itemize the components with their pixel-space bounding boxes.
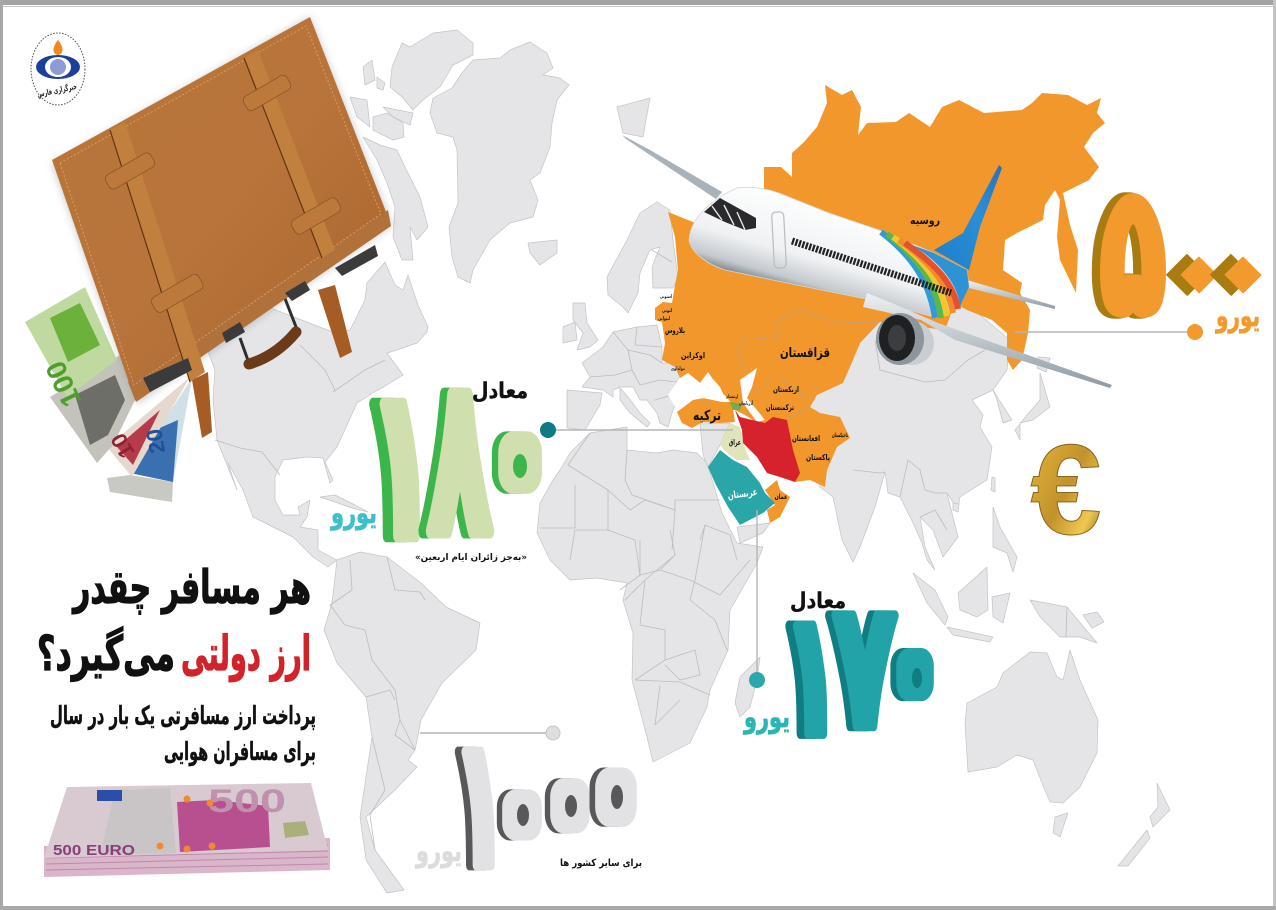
- number 180: [357, 333, 546, 586]
- heading 180 euro: [330, 333, 556, 586]
- map: Europe: [563, 202, 682, 430]
- number 1000: ۰: [547, 737, 593, 863]
- euro symbol: €: [1030, 419, 1102, 562]
- leader lines: [420, 332, 1190, 733]
- country labels: عراق: [729, 438, 741, 447]
- note bottom strip: [107, 475, 173, 502]
- top note: [44, 783, 328, 858]
- label 500 euro on note: 500 EURO: [53, 842, 135, 859]
- buckle loops: [103, 74, 343, 314]
- note: «به‌جز زائران ایام اربعین»: [415, 553, 527, 563]
- note building: [177, 800, 270, 852]
- country labels: قزاقستان: [780, 346, 830, 361]
- case side edge: [128, 210, 391, 402]
- banknote stack: [44, 783, 330, 877]
- plane: stabilizer: [967, 280, 1055, 309]
- country labels: پاکستان: [806, 453, 830, 462]
- number 1000: ۰: [586, 722, 635, 857]
- map: Greenland and Arctic Canada: [350, 30, 650, 283]
- plane: far wing: [622, 135, 722, 199]
- region: Iran: [735, 410, 800, 482]
- title line 2 black: می‌گیرد؟: [37, 626, 175, 682]
- country labels: بلاروس: [665, 326, 685, 336]
- label equivalent: معادل: [472, 379, 528, 404]
- number 180: ۰: [488, 383, 540, 526]
- number 170: ۱: [775, 578, 833, 774]
- number 180: ۱: [367, 343, 437, 586]
- country labels: تاجیکستان: [832, 432, 848, 439]
- country labels: اوکراین: [681, 351, 705, 360]
- heading 500 euro: [1091, 147, 1276, 371]
- number 500: ۵: [1092, 147, 1159, 354]
- borders: Central Asia: [737, 310, 880, 350]
- subtitle line 2: برای مسافران هوایی: [164, 737, 316, 767]
- note 50 grey: [50, 355, 135, 463]
- map: South America: [324, 552, 480, 893]
- case body: [52, 17, 390, 400]
- plane: door: [772, 212, 786, 268]
- shadow: [52, 17, 392, 404]
- label euro: یورو: [743, 700, 790, 735]
- strap tails: [192, 372, 212, 438]
- euro banknotes: [25, 287, 192, 502]
- number 1000: ۰: [541, 737, 588, 863]
- number 500 on note: 500: [208, 783, 286, 819]
- sea: Black Sea: [668, 372, 724, 410]
- dot: [1187, 324, 1203, 340]
- right strap: [244, 50, 335, 258]
- flag: [97, 790, 122, 801]
- stitching: [60, 26, 381, 385]
- region: Turkey: [677, 398, 735, 428]
- country labels: ترکیه: [693, 408, 721, 424]
- number 1000: [444, 700, 641, 907]
- country labels: لیتوانی: [658, 316, 670, 322]
- logo flame: [54, 40, 62, 55]
- number 170: ۰: [893, 609, 937, 730]
- map: Africa and Arabia south: [537, 423, 770, 762]
- map: South and East Asia: [800, 290, 1104, 643]
- heading 1000 euro: [415, 700, 642, 907]
- note 10 red: [107, 377, 190, 477]
- country labels: روسیه: [910, 214, 940, 227]
- subtitle line 1: پرداخت ارز مسافرتی یک بار در سال: [50, 701, 316, 731]
- number 170: ۷: [833, 565, 897, 767]
- number 170: ۱: [783, 578, 841, 774]
- hologram: [283, 821, 309, 838]
- region: countries at 500 euro (orange): [655, 85, 1105, 525]
- plane: fuselage: [689, 187, 969, 318]
- number 180: ۸: [421, 333, 485, 582]
- dot: [749, 672, 765, 688]
- number 170: [775, 565, 937, 774]
- number 1000: ۱: [444, 700, 502, 907]
- suitcase: [52, 17, 392, 438]
- plane: tail fin: [934, 165, 1002, 270]
- logo eye: [36, 55, 80, 79]
- plane: tail cone: [912, 245, 969, 306]
- airplane: [622, 135, 1112, 388]
- number 500: ۵: [1099, 147, 1167, 354]
- logo text: خبرگزاری فارس: [36, 81, 78, 100]
- country labels: لتونی: [662, 308, 672, 314]
- sea: Caspian: [740, 368, 765, 422]
- number 180: ۸: [428, 333, 492, 582]
- dot: [546, 726, 560, 740]
- country labels: افغانستان: [792, 434, 820, 443]
- euro banknotes: 100: [39, 356, 87, 412]
- number 1000: ۰: [499, 751, 545, 868]
- label 20: 20: [141, 427, 170, 456]
- plane: near wing: [863, 293, 1112, 388]
- country labels: مولداوی: [671, 366, 685, 372]
- country labels: آذربایجان: [739, 399, 753, 407]
- note center panel: [100, 788, 176, 855]
- world map: [200, 30, 1170, 893]
- region: Oman: [765, 480, 790, 523]
- number 170: ۷: [827, 565, 891, 767]
- country labels: ازبکستان: [773, 385, 799, 394]
- label 10: 10: [106, 429, 139, 463]
- number 180: ۱: [357, 343, 427, 586]
- dot: [540, 422, 556, 438]
- country labels: استونی: [660, 294, 672, 300]
- number 1000: ۰: [493, 751, 540, 868]
- logo: [31, 33, 85, 105]
- title line 2 red: ارز دولتی: [181, 626, 311, 682]
- title: [37, 560, 316, 767]
- number 1000: ۰: [591, 722, 641, 857]
- country labels: ترکمنستان: [766, 403, 794, 412]
- stars: [156, 796, 216, 852]
- country labels: عربستان: [727, 487, 758, 502]
- note 20 blue: [130, 378, 192, 482]
- label euro: یورو: [330, 496, 377, 531]
- heading 170 euro: [743, 565, 937, 774]
- handle: [240, 296, 298, 366]
- note: برای سایر کشور ها: [560, 858, 642, 869]
- map: Australia and New Zealand: [965, 650, 1170, 866]
- label equivalent: معادل: [790, 589, 846, 614]
- note 100 green: [25, 287, 117, 397]
- number 170: ۰: [887, 609, 931, 730]
- map: North America: [200, 262, 428, 567]
- plane: engine: [876, 313, 934, 365]
- plane: rainbow stripes: [881, 232, 958, 318]
- left strap: [110, 122, 205, 382]
- region: Armenia and Azerbaijan: [730, 402, 742, 410]
- region: Saudi Arabia: [708, 450, 775, 525]
- country labels: [658, 214, 940, 502]
- logo ring: [31, 33, 85, 105]
- country labels: ارمنستان: [726, 394, 738, 400]
- stack sides: [44, 838, 330, 877]
- plane: cabin windows: [792, 241, 951, 293]
- plane: cockpit: [704, 198, 756, 230]
- label euro: یورو: [415, 834, 462, 869]
- number 500: ۵: [1096, 147, 1163, 354]
- locks: [143, 245, 378, 392]
- number 180: ۰: [494, 383, 546, 526]
- country labels: عمان: [774, 493, 788, 501]
- region: Iraq: [720, 423, 750, 460]
- number 1000: ۱: [451, 700, 509, 907]
- title line 1: هر مسافر چقدر: [72, 560, 311, 615]
